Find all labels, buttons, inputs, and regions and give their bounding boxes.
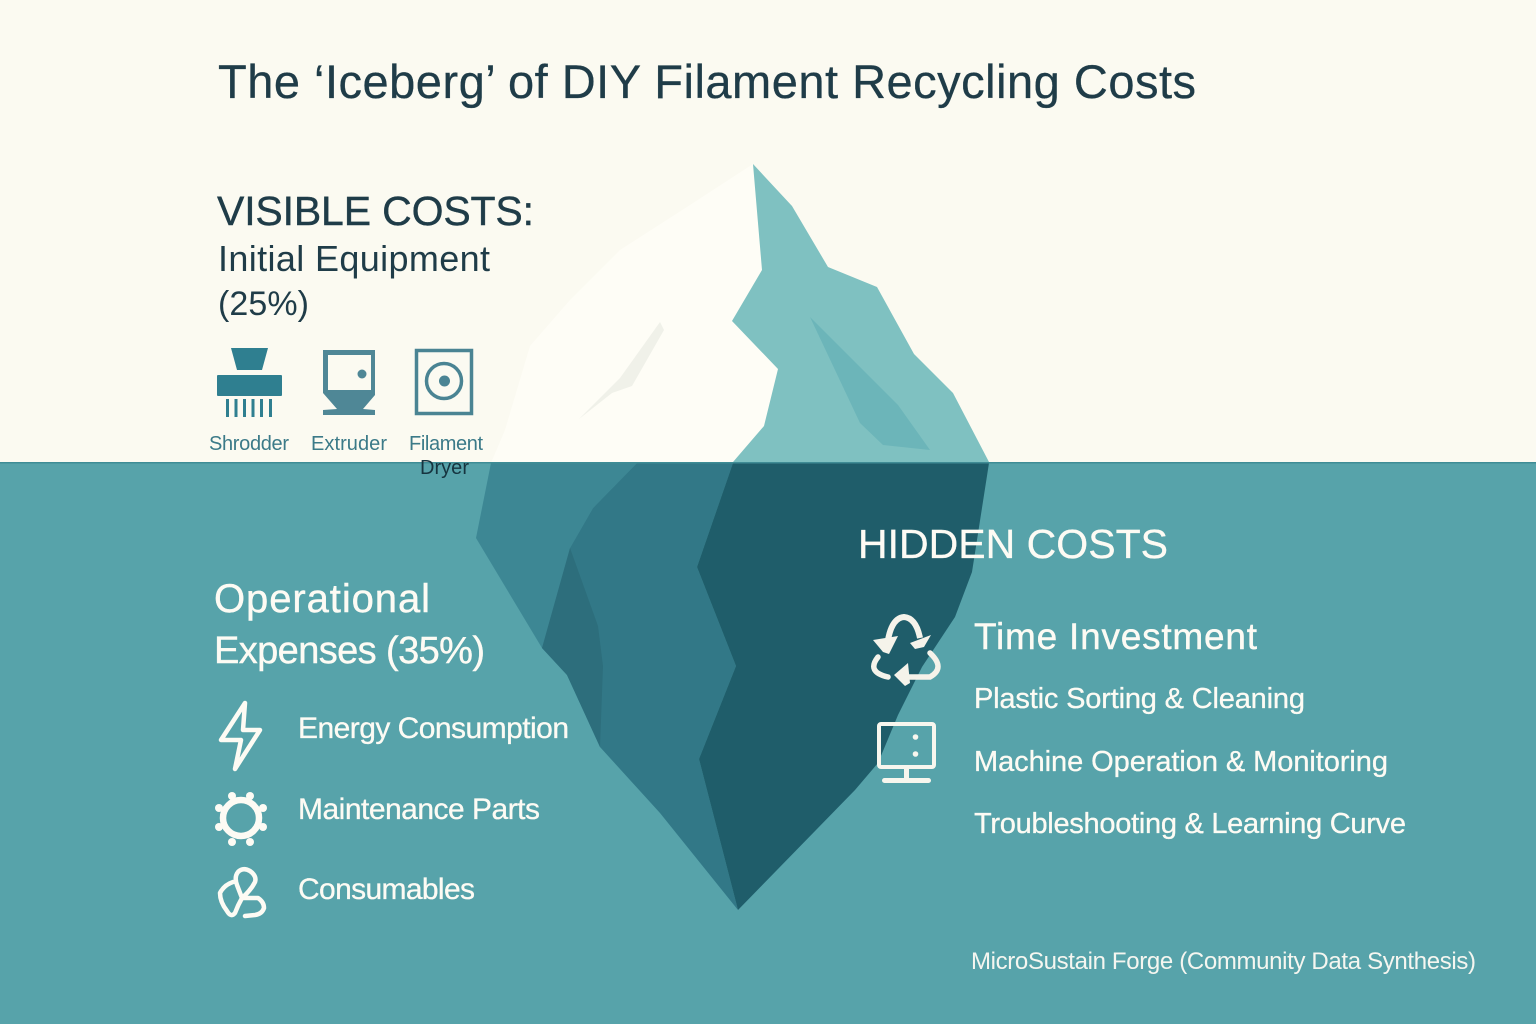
iceberg: underwater dark right face [697, 463, 989, 910]
icon: gear [215, 792, 267, 846]
text: consumables: Consumables [298, 873, 475, 906]
iceberg: white face shadow [579, 322, 664, 419]
text: plastic sorting and cleaning: Plastic Sorting & Cleaning [974, 683, 1305, 715]
heading: operational expenses: Operational [214, 577, 430, 621]
iceberg illustration [476, 164, 989, 910]
text: 25 percent: (25%) [218, 285, 309, 323]
icon: recycling arrows [873, 617, 938, 686]
iceberg: underwater dark left facet [542, 548, 603, 747]
panel: operational expenses [214, 577, 569, 916]
waterline [0, 462, 1536, 464]
label: filament: Filament [409, 433, 483, 455]
icon: consumables loop [220, 869, 264, 916]
text: time investment: Time Investment [974, 616, 1258, 657]
iceberg: teal shaded face [732, 164, 989, 462]
label: shredder: Shrodder [209, 433, 289, 455]
icon: lightning bolt [221, 703, 260, 769]
label: extruder: Extruder [311, 433, 387, 455]
text: initial equipment: Initial Equipment [218, 238, 490, 279]
icon: shredder [217, 348, 282, 417]
iceberg: sunlit white face [491, 164, 778, 463]
text: energy consumption: Energy Consumption [298, 712, 569, 745]
panel: hidden costs [858, 521, 1406, 840]
text: machine operation and monitoring: Machine Operation & Monitoring [974, 746, 1388, 778]
iceberg: underwater middle face [542, 463, 738, 910]
icon: computer monitor [879, 724, 934, 783]
text: troubleshooting and learning curve: Troubleshooting & Learning Curve [974, 808, 1406, 840]
title: The ‘Iceberg’ of DIY Filament Recycling Costs [218, 55, 1196, 108]
heading: expenses 35 percent: Expenses (35%) [214, 630, 485, 672]
water background [0, 463, 1536, 1024]
heading: visible costs: VISIBLE COSTS: [217, 188, 534, 234]
label: dryer: Dryer [420, 457, 469, 479]
iceberg: teal face facet [810, 317, 930, 450]
icon: filament dryer [416, 350, 472, 414]
panel: visible costs [209, 188, 534, 479]
icon: extruder [323, 350, 375, 415]
iceberg: underwater left face [476, 463, 637, 648]
text: maintenance parts: Maintenance Parts [298, 793, 540, 826]
source credit: MicroSustain Forge (Community Data Synthesis) [971, 948, 1476, 975]
heading: hidden costs: HIDDEN COSTS [858, 521, 1168, 567]
